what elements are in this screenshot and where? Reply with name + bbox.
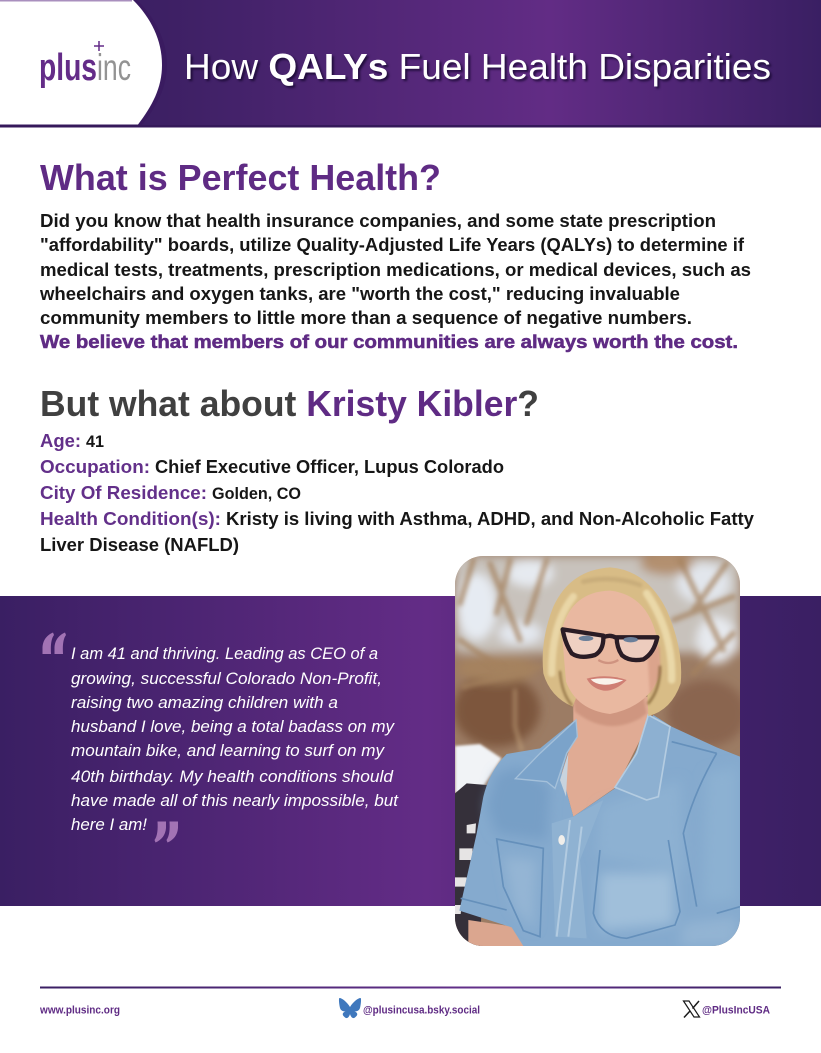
collars xyxy=(515,720,577,788)
logo: plusinc: plus xyxy=(39,47,97,89)
profile details: Age: xyxy=(40,431,81,451)
quote text: mountain bike, and learning to surf on my xyxy=(71,742,386,760)
bench xyxy=(455,783,487,946)
profile details: Kristy is living with Asthma, ADHD, and Non-Alcoholic Fatty xyxy=(226,509,754,529)
quote text: 40th birthday. My health conditions should xyxy=(71,768,394,786)
logo: plusinc: inc xyxy=(97,47,131,88)
profile details: Liver Disease (NAFLD) xyxy=(40,535,239,555)
intro paragraph: Did you know that health insurance companies, and some state prescription xyxy=(40,211,716,231)
footer: website: www.plusinc.org xyxy=(39,1004,120,1016)
hair strands xyxy=(552,579,672,705)
shirt undershirt xyxy=(560,753,568,797)
intro paragraph: community members to little more than a sequence of negative numbers. xyxy=(40,308,692,328)
profile details: City Of Residence: xyxy=(40,483,207,503)
quote text: have made all of this nearly impossible, but xyxy=(71,792,399,810)
profile details: 41 xyxy=(86,433,104,451)
neck xyxy=(562,697,650,817)
quote text: growing, successful Colorado Non-Profit, xyxy=(71,670,382,688)
heading: But what about Kristy Kibler?: But what about Kristy Kibler? xyxy=(40,383,539,424)
seams and pockets xyxy=(461,742,740,938)
denim shirt xyxy=(459,715,740,946)
profile details: Occupation: xyxy=(40,457,150,477)
quote band xyxy=(0,596,821,906)
glasses xyxy=(563,629,657,660)
heading: What is Perfect Health?: What is Perfect Health? xyxy=(40,157,441,198)
profile details: Chief Executive Officer, Lupus Colorado xyxy=(155,457,504,477)
profile details: Health Condition(s): xyxy=(40,509,221,529)
nose xyxy=(598,660,618,663)
placket xyxy=(552,800,603,938)
icon: butterfly xyxy=(339,998,361,1018)
quote text: here I am! xyxy=(71,816,147,834)
hair back xyxy=(543,567,681,716)
intro paragraph xyxy=(39,211,751,328)
arm xyxy=(468,920,525,946)
icon: opening quote mark xyxy=(42,632,66,654)
icon: closing quote mark xyxy=(154,822,178,842)
profile details xyxy=(40,431,754,555)
quote text: husband I love, being a total badass on my xyxy=(71,718,396,736)
quote text: raising two amazing children with a xyxy=(71,694,338,712)
title: How QALYs Fuel Health Disparities xyxy=(184,46,771,87)
footer rule xyxy=(40,986,781,988)
portrait photo xyxy=(453,552,747,946)
footer: X handle: @PlusIncUSA xyxy=(702,1004,770,1016)
quote text: I am 41 and thriving. Leading as CEO of a xyxy=(71,645,378,663)
icon: X logo xyxy=(684,1001,700,1018)
intro paragraph: medical tests, treatments, prescription medications, or medical devices, such as xyxy=(40,260,751,280)
face xyxy=(562,591,661,714)
purple statement: We believe that members of our communities are always worth the cost. xyxy=(40,332,738,352)
profile details: Golden, CO xyxy=(212,484,301,503)
smile xyxy=(587,676,627,691)
header banner xyxy=(0,0,821,128)
quote text xyxy=(71,645,399,834)
footer: bluesky handle: @plusincusa.bsky.social xyxy=(363,1004,480,1016)
intro paragraph: wheelchairs and oxygen tanks, are "worth the cost," reducing invaluable xyxy=(39,284,680,304)
intro paragraph: "affordability" boards, utilize Quality-Adjusted Life Years (QALYs) to determine if xyxy=(40,235,745,255)
